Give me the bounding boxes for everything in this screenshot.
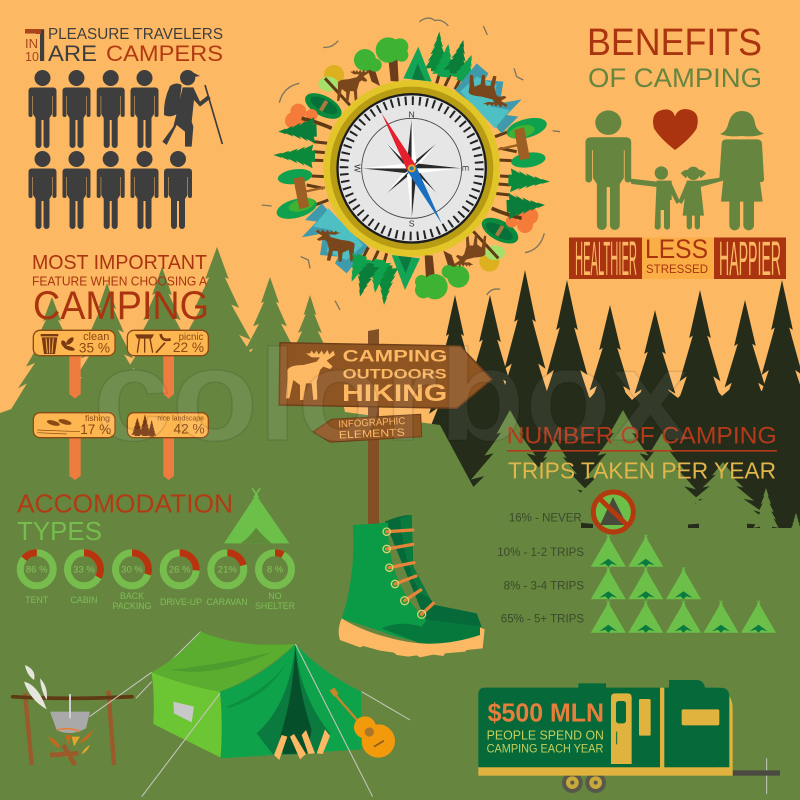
- left green forest: [0, 247, 800, 800]
- panel: benefits of camping: [569, 22, 786, 286]
- icon: moose: [286, 350, 335, 400]
- compass body: E: [461, 165, 471, 171]
- post: [368, 329, 379, 524]
- donut: cabin 33%: CABIN: [71, 595, 97, 605]
- donut: no shelter 8%: [255, 553, 295, 611]
- benefit box: less stressed: STRESSED: [646, 262, 708, 276]
- compass body: W: [352, 164, 362, 173]
- icon: family with heart: [585, 109, 764, 230]
- small arrow sign: [313, 414, 422, 442]
- donut: drive-up 26%: [160, 553, 202, 607]
- watermark: colorbox: [93, 322, 690, 468]
- donut: no shelter 8%: SHELTER: [255, 601, 295, 611]
- donut: back packing 30%: BACK: [120, 591, 144, 601]
- donut: back packing 30%: PACKING: [113, 601, 152, 611]
- sign: nice landscape 42%: nice landscape: [157, 415, 204, 422]
- benefit box: less stressed: [642, 234, 714, 279]
- sign: fishing 17%: fishing: [85, 413, 110, 423]
- heading: of camping: OF CAMPING: [588, 63, 762, 93]
- right green foreground trees: [447, 410, 800, 533]
- sign: nice landscape 42%: 42 %: [174, 421, 205, 436]
- donut: tent 86%: 86 %: [26, 564, 48, 576]
- heading: number of camping: NUMBER OF CAMPING: [507, 422, 777, 449]
- heading: 1 in 10 pleasure travelers are campers: [25, 28, 222, 61]
- heading: trips taken per year: TRIPS TAKEN PER YEAR: [508, 457, 776, 483]
- row: 8% 3-4 trips: [504, 567, 701, 599]
- benefit box: less stressed: LESS: [645, 234, 708, 264]
- dark forest: [413, 270, 800, 530]
- donut: no shelter 8%: NO: [268, 591, 282, 601]
- row: 10% 1-2 trips: 10% - 1-2 TRIPS: [497, 547, 584, 559]
- heading: 1 in 10 pleasure travelers are campers: ARE: [48, 41, 97, 66]
- heading: most important feature when choosing a camping: [32, 252, 209, 328]
- illustration: camper trailer with $500 mln: CAMPING EACH YEAR: [487, 742, 603, 756]
- row: 16% never: [509, 492, 633, 532]
- big arrow sign: OUTDOORS: [343, 366, 447, 382]
- donut: back packing 30%: 30 %: [121, 564, 143, 576]
- row: 65% 5+ trips: [501, 601, 776, 633]
- icon: guitar: [329, 688, 395, 758]
- compass body: [323, 80, 500, 257]
- donut: caravan 21%: 21%: [218, 564, 237, 576]
- big arrow sign: CAMPING: [343, 346, 447, 365]
- small arrow sign: INFOGRAPHIC: [338, 416, 406, 430]
- big arrow sign: HIKING: [342, 380, 447, 407]
- sign: clean 35%: 35 %: [79, 341, 110, 356]
- donut: no shelter 8%: 8 %: [267, 564, 284, 576]
- icon: no tent: [593, 492, 633, 532]
- row: 16% never: 16% - NEVER: [509, 513, 582, 525]
- heading: 1 in 10 pleasure travelers are campers: PLEASURE TRAVELERS: [48, 26, 223, 43]
- panel: 1 in 10 campers: [25, 19, 223, 229]
- heading: most important feature when choosing a camping: MOST IMPORTANT: [32, 252, 207, 274]
- sign: clean 35%: [33, 330, 115, 399]
- donut: back packing 30%: [113, 553, 152, 611]
- row: 10% 1-2 trips: [497, 535, 663, 567]
- illustration: campfire with pot: [13, 665, 132, 765]
- heading: most important feature when choosing a camping: CAMPING: [33, 284, 209, 328]
- big arrow sign: [279, 343, 492, 408]
- heading: most important feature when choosing a camping: FEATURE WHEN CHOOSING A: [32, 274, 207, 288]
- heading: 1 in 10 pleasure travelers are campers: 10: [25, 49, 39, 64]
- row: 65% 5+ trips: 65% - 5+ TRIPS: [501, 614, 584, 626]
- heading: 1 in 10 pleasure travelers are campers: 1: [26, 19, 55, 77]
- pictogram: ten people: [28, 70, 192, 229]
- compass needle: [382, 113, 442, 223]
- donut: tent 86%: TENT: [25, 595, 49, 605]
- illustration: camper trailer with $500 mln: PEOPLE SPEND ON: [487, 727, 604, 742]
- sign: picnic 22%: picnic: [179, 332, 203, 343]
- heading: benefits: BENEFITS: [587, 22, 762, 64]
- compass body: N: [409, 109, 415, 119]
- row: 8% 3-4 trips: 8% - 3-4 TRIPS: [504, 580, 584, 592]
- heading: 1 in 10 pleasure travelers are campers: IN: [25, 36, 38, 51]
- donut: caravan 21%: CARAVAN: [206, 597, 248, 607]
- small arrow sign: ELEMENTS: [339, 427, 405, 441]
- icon: hiker: [162, 70, 222, 147]
- illustration: tent: [89, 632, 410, 797]
- benefit box: healthier: [569, 233, 642, 286]
- illustration: camper trailer with $500 mln: [478, 680, 780, 794]
- heading: types: TYPES: [17, 516, 102, 546]
- icon: tent: [224, 488, 289, 543]
- donut: cabin 33%: [68, 553, 100, 605]
- sign: fishing 17%: [33, 413, 115, 480]
- donut: caravan 21%: [206, 553, 248, 607]
- donut: drive-up 26%: 26 %: [169, 564, 191, 576]
- panel: number of camping trips: [497, 422, 777, 633]
- signpost: [279, 329, 492, 524]
- donut: drive-up 26%: DRIVE-UP: [160, 597, 202, 607]
- panel: accommodation types: [13, 488, 295, 611]
- sign: nice landscape 42%: [127, 413, 208, 480]
- sign: fishing 17%: 17 %: [80, 422, 111, 437]
- scenery ring: [273, 31, 550, 306]
- heading: accommodation: ACCOMODATION: [17, 489, 233, 519]
- illustration: camper trailer with $500 mln: $500 MLN: [488, 698, 604, 728]
- donut: tent 86%: [13, 546, 60, 605]
- illustration: hiking boot: [339, 515, 485, 657]
- sign: picnic 22%: [127, 330, 208, 399]
- sign: clean 35%: clean: [83, 331, 109, 343]
- panel: most important feature: [32, 252, 209, 480]
- compass body: S: [409, 219, 415, 229]
- heading: 1 in 10 pleasure travelers are campers: CAMPERS: [106, 41, 223, 66]
- sign: picnic 22%: 22 %: [173, 340, 204, 355]
- compass with ring of nature scenery: [273, 31, 550, 306]
- donut: cabin 33%: 33 %: [73, 564, 95, 576]
- birds: [262, 18, 560, 310]
